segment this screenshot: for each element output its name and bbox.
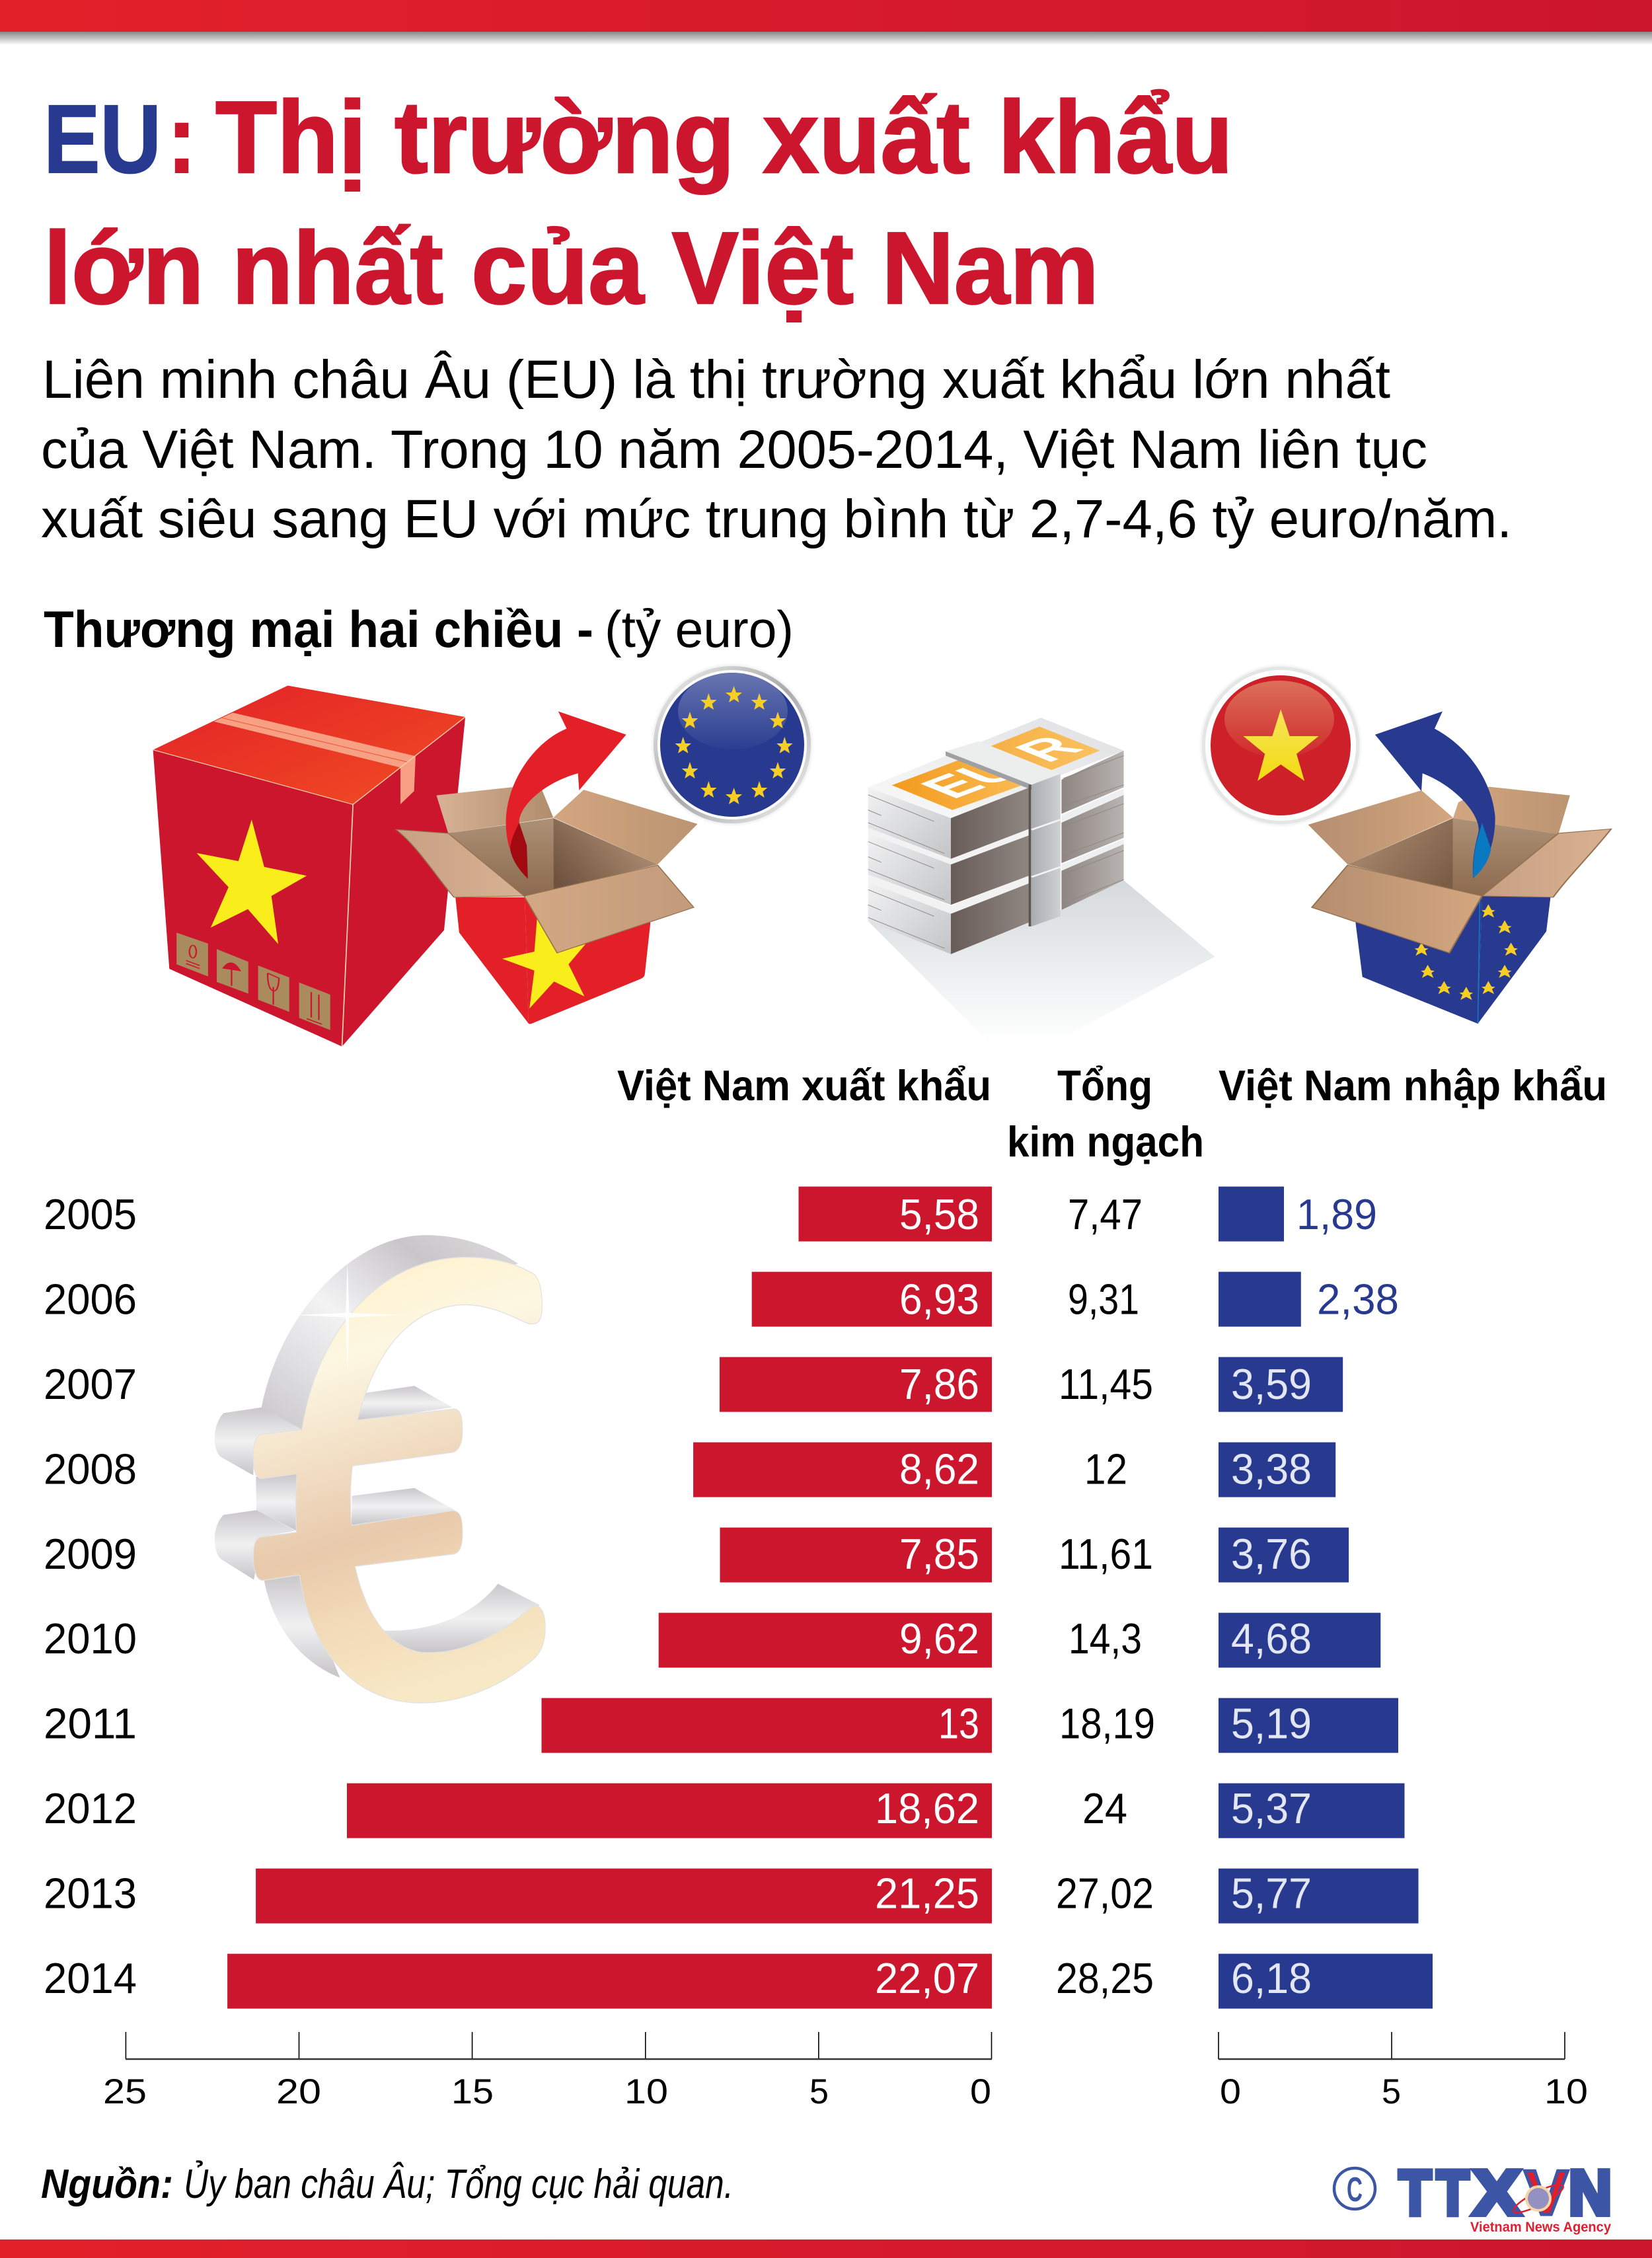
row: 2008: 8,62 [899,1445,979,1493]
logo: TTXVN Vietnam News Agency [1334,2158,1612,2235]
column headers: Việt Nam nhập khẩu [1219,1061,1607,1110]
row: 2009: 7,85 [899,1530,979,1578]
copyright mark [1334,2168,1375,2209]
row: 2011 [44,1698,1398,1753]
intro paragraph: Liên minh châu Âu (EU) là thị trường xuất khẩu lớn nhất [42,350,1390,410]
axis: import scale: 5 [1382,2072,1401,2111]
row: 2013: 21,25 [875,1869,979,1918]
row: 2012 [44,1784,1405,1838]
intro paragraph [41,350,1512,549]
agency wordmark: V [1524,2158,1568,2228]
row: 2014: 6,18 [1231,1954,1312,2002]
axis: import scale [1219,2032,1588,2111]
row: 2009: 2009 [44,1530,137,1578]
illustration: Vietnam export boxes [153,686,698,1047]
box front flaps [396,829,694,953]
row: 2007: 7,86 [899,1360,979,1408]
banknote label text [907,730,1097,804]
agency wordmark: T [1399,2158,1431,2228]
icon: Vietnam flag badge [1199,663,1363,827]
column headers [617,1061,1607,1166]
axis: import scale: 10 [1544,2072,1588,2111]
row: 2005: 2005 [44,1190,137,1238]
globe emblem [1511,2180,1566,2217]
row: 2006: 6,93 [899,1275,979,1323]
icon: open red box with star [437,787,698,1024]
copyright mark: C [1347,2171,1363,2209]
row: 2013: 5,77 [1231,1869,1312,1918]
bottom red banner [0,2239,1652,2258]
title: lớn nhất của Việt Nam [44,211,1099,325]
agency wordmark: N [1569,2158,1612,2228]
chart rows [44,1187,1433,2009]
row: 2008 [44,1443,1335,1497]
illustration: Vietnam import box [1308,712,1611,1024]
row: 2006: 2,38 [1317,1275,1399,1323]
column headers: Việt Nam xuất khẩu [617,1061,991,1110]
row: 2014: 22,07 [875,1954,979,2002]
row: 2007: 2007 [44,1360,137,1408]
row: 2007 [44,1357,1343,1412]
row: 2006: 9,31 [1068,1275,1139,1323]
column headers: Tổng [1057,1061,1152,1110]
row: 2012: 18,62 [875,1784,979,1832]
banknote label text: EU [907,753,1037,804]
row: 2007: 3,59 [1231,1360,1312,1408]
row: 2012: 24 [1082,1784,1127,1832]
arrow: blue import arrow [1375,712,1495,878]
axis: export scale: 0 [970,2072,991,2111]
row: 2006: 2006 [44,1275,137,1323]
arrow: red export arrow [506,712,626,879]
row: 2011: 18,19 [1059,1700,1155,1748]
row: 2011: 2011 [44,1700,137,1748]
top red banner [0,0,1652,45]
row: 2010: 9,62 [899,1614,979,1663]
icon: euro banknote stacks [868,718,1215,1043]
agency wordmark: X [1473,2158,1521,2228]
row: 2012: 5,37 [1231,1784,1312,1832]
axis: export scale: 20 [276,2072,321,2111]
row: 2013: 2013 [44,1869,137,1918]
title: EU [44,85,161,194]
title: Thị trường xuất khẩu [215,80,1233,194]
row: 2008: 3,38 [1231,1445,1312,1493]
icon: EU flag badge [650,663,814,827]
axis: export scale: 15 [451,2072,494,2111]
row: 2014: 2014 [44,1954,137,2002]
row: 2005: 1,89 [1296,1190,1377,1238]
agency wordmark: T [1437,2158,1469,2228]
axis: export scale: 10 [624,2072,668,2111]
icon: closed red box with star [153,686,465,1047]
row: 2014 [44,1954,1433,2009]
icon: silver euro symbol [215,1235,545,1703]
icon: open EU box [1308,787,1570,1024]
axis: export scale: 25 [103,2072,147,2111]
intro paragraph: của Việt Nam. Trong 10 năm 2005-2014, Việt Nam liên tục [41,420,1427,480]
row: 2010: 14,3 [1069,1614,1142,1663]
row: 2010 [44,1613,1380,1668]
row: 2012: 2012 [44,1784,137,1832]
axis: export scale: 5 [809,2072,829,2111]
axis: export scale [103,2032,992,2111]
row: 2010: 4,68 [1231,1614,1312,1663]
row: 2011: 13 [938,1700,979,1748]
row: 2005: 5,58 [899,1190,979,1238]
row: 2006 [44,1272,1399,1327]
row: 2005 [44,1187,1377,1242]
row: 2013 [44,1869,1418,1924]
row: 2009 [44,1528,1349,1583]
source note: Ủy ban châu Âu; Tổng cục hải quan. [184,2161,733,2207]
row: 2014: 28,25 [1056,1954,1154,2002]
column headers: kim ngạch [1007,1117,1204,1166]
title [44,80,1233,325]
intro paragraph: xuất siêu sang EU với mức trung bình từ 2,7-4,6 tỷ euro/năm. [41,489,1512,549]
banknote paper band [946,741,1061,926]
row: 2009: 11,61 [1059,1530,1153,1578]
logo: TTXVN Vietnam News Agency: Vietnam News Agency [1470,2220,1611,2235]
source note [41,2161,733,2207]
row: 2008: 12 [1084,1445,1127,1493]
row: 2010: 2010 [44,1614,137,1663]
row: 2005: 7,47 [1068,1190,1143,1238]
source note: Nguồn: [41,2162,173,2207]
box front flaps [1312,829,1611,953]
row: 2009: 3,76 [1231,1530,1312,1578]
row: 2013: 27,02 [1056,1869,1154,1918]
chart subheading: (tỷ euro) [605,600,794,658]
agency wordmark [1399,2158,1612,2228]
row: 2008: 2008 [44,1445,137,1493]
row: 2011: 5,19 [1231,1700,1312,1748]
banknote label text: R [1001,730,1097,768]
axis: import scale: 0 [1220,2072,1241,2111]
title: : [167,85,196,194]
row: 2007: 11,45 [1059,1360,1153,1408]
chart subheading: Thương mại hai chiều - [44,600,593,658]
